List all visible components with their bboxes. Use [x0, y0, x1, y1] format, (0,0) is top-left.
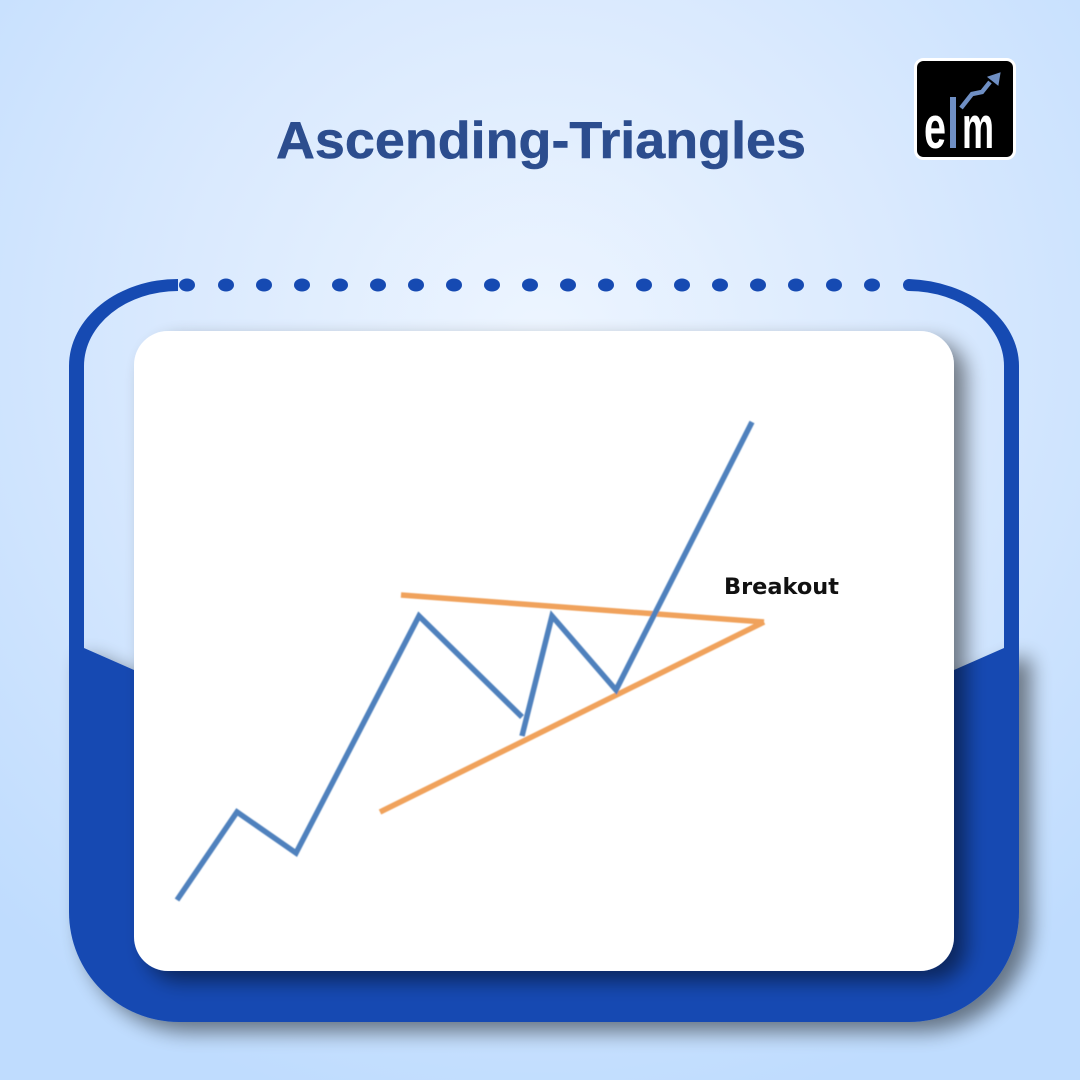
frame base with shadow — [69, 648, 1019, 1022]
label: breakout: Breakout — [724, 575, 839, 600]
panel: white chart card — [134, 331, 954, 971]
price line breakout — [522, 422, 752, 736]
title: Ascending-Triangles — [276, 112, 806, 170]
icon: elm logo: m — [962, 94, 994, 161]
frame top-right arc — [903, 279, 1019, 650]
dotted top line — [179, 278, 880, 292]
icon: elm logo: e — [924, 94, 946, 161]
icon: elm logo — [916, 60, 1014, 161]
price line — [177, 616, 522, 900]
frame top-left arc — [69, 279, 178, 650]
panel: blue frame — [69, 279, 1019, 1022]
chart: ascending triangle — [177, 422, 764, 900]
upper resistance line — [401, 595, 764, 622]
lower support line — [380, 622, 764, 812]
